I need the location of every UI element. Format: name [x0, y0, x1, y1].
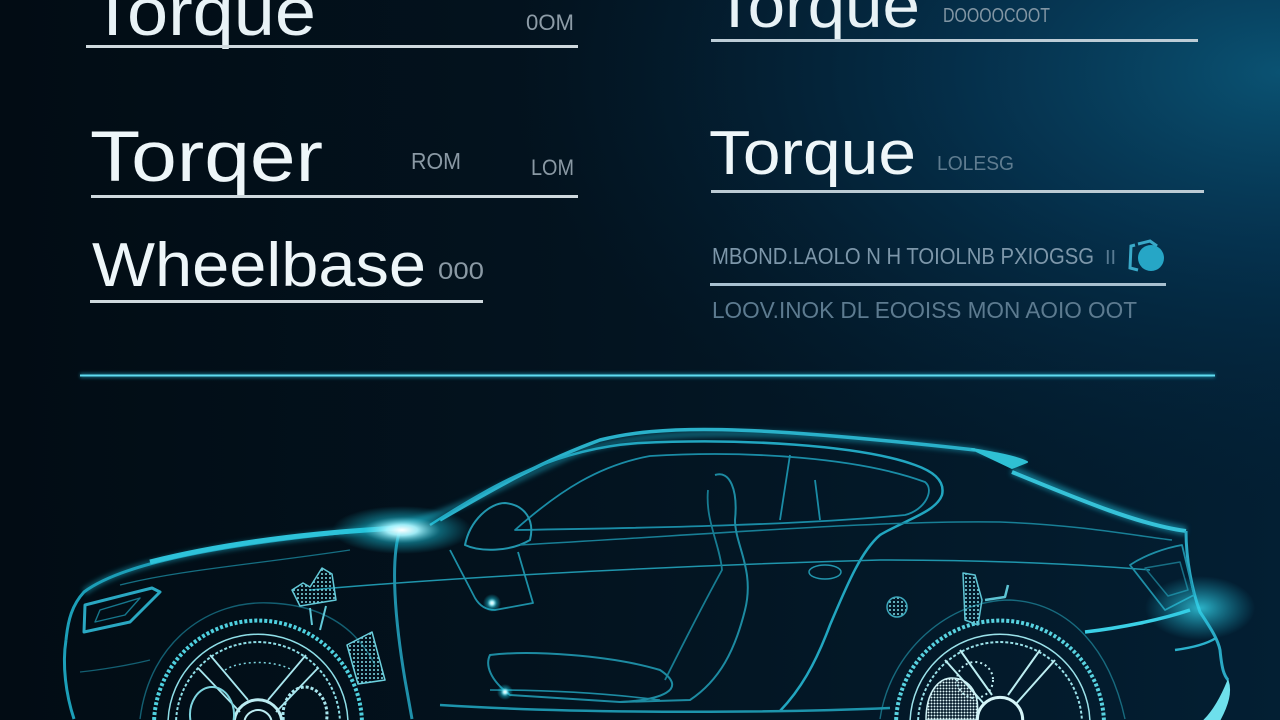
light flares [332, 506, 1255, 700]
spec block: small text right [710, 241, 1166, 323]
icon: camera [1130, 241, 1164, 271]
divider: glowing cyan line [80, 373, 1215, 378]
brake and suspension detail front [292, 568, 385, 684]
spec row: torque top left: 0OM [526, 10, 574, 35]
spec row: torque right: LOLESG [937, 153, 1014, 175]
spec block: small text right: LOOV.INOK DL EOOISS MON AOIO OOT [712, 297, 1137, 323]
spec row: torque right [709, 119, 1204, 193]
seat [488, 474, 748, 702]
spec row: torque top left [86, 0, 578, 50]
spec row: torquer left: ROM [411, 148, 461, 174]
spec block: small text right: II [1105, 247, 1116, 269]
car body outline glow [64, 429, 1230, 720]
spec row: torque right: Torque [709, 119, 916, 188]
rear suspension detail [887, 573, 1008, 625]
body lines [80, 522, 1194, 719]
car illustration [64, 429, 1255, 720]
spec row: wheelbase: 000 [438, 258, 484, 285]
rear wheel [896, 621, 1104, 720]
front wheel [154, 621, 362, 720]
spec row: torquer left: LOM [531, 155, 574, 180]
window frame [395, 441, 943, 719]
spec row: torque top right [711, 0, 1198, 42]
spec block: small text right: MBOND.LAOLO N H TOIOLNB PXIOGSG [712, 243, 1094, 269]
spec row: torque top right: DOOOOCOOT [943, 5, 1050, 27]
spec row: wheelbase: Wheelbase [92, 231, 426, 300]
spec row: torquer left: Torqer [90, 118, 323, 197]
spec row: torquer left [90, 118, 578, 198]
